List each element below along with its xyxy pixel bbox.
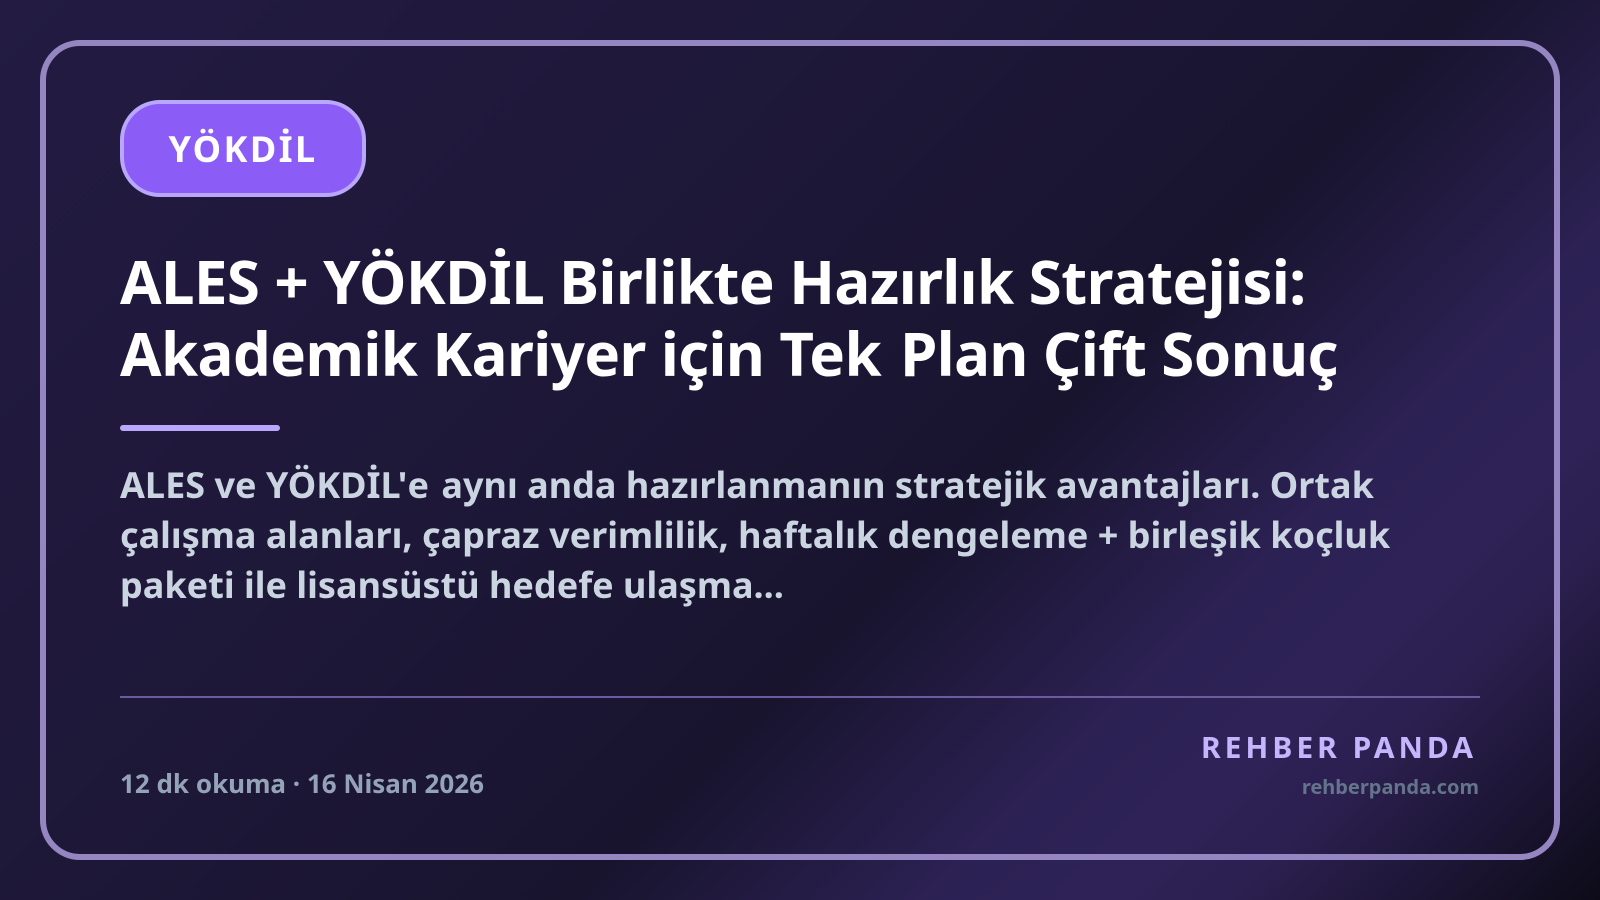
title <box>120 240 1338 394</box>
description <box>120 460 1390 609</box>
accent bar <box>120 425 280 431</box>
meta: reading time and date: 12 dk okuma · 16 Nisan 2026 <box>120 765 484 801</box>
description: ALES ve YÖKDİL'e aynı anda hazırlanmanın stratejik avantajları. Ortak <box>120 460 1374 509</box>
badge: YÖKDİL <box>120 100 366 197</box>
title: ALES + YÖKDİL Birlikte Hazırlık Stratejisi: <box>120 240 1306 322</box>
description: çalışma alanları, çapraz verimlilik, haftalık dengeleme + birleşik koçluk <box>120 510 1390 559</box>
brand name: REHBER PANDA <box>1201 726 1477 767</box>
description: paketi ile lisansüstü hedefe ulaşma... <box>120 560 784 609</box>
footer divider <box>120 696 1480 698</box>
brand url: rehberpanda.com <box>1302 773 1479 800</box>
badge: YÖKDİL: YÖKDİL <box>168 124 318 173</box>
title: Akademik Kariyer için Tek Plan Çift Sonuç <box>120 312 1338 394</box>
